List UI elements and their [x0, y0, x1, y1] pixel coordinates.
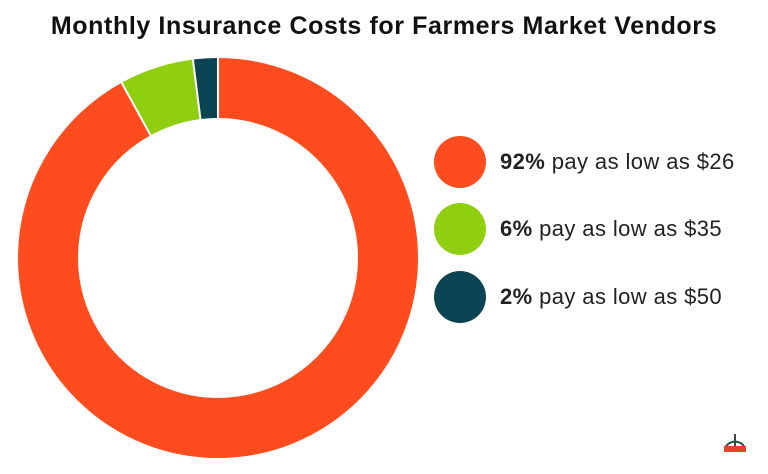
legend: 2%: 2% pay as low as $50	[500, 284, 722, 309]
legend: 2%	[434, 271, 722, 323]
legend: 92%	[434, 136, 735, 188]
icon: logo	[724, 434, 746, 452]
legend: 6%	[434, 203, 722, 255]
legend: 92%: 92% pay as low as $26	[500, 149, 735, 174]
legend: 6%: 6% pay as low as $35	[500, 216, 722, 241]
title: Monthly Insurance Costs for Farmers Market Vendors	[51, 12, 717, 40]
